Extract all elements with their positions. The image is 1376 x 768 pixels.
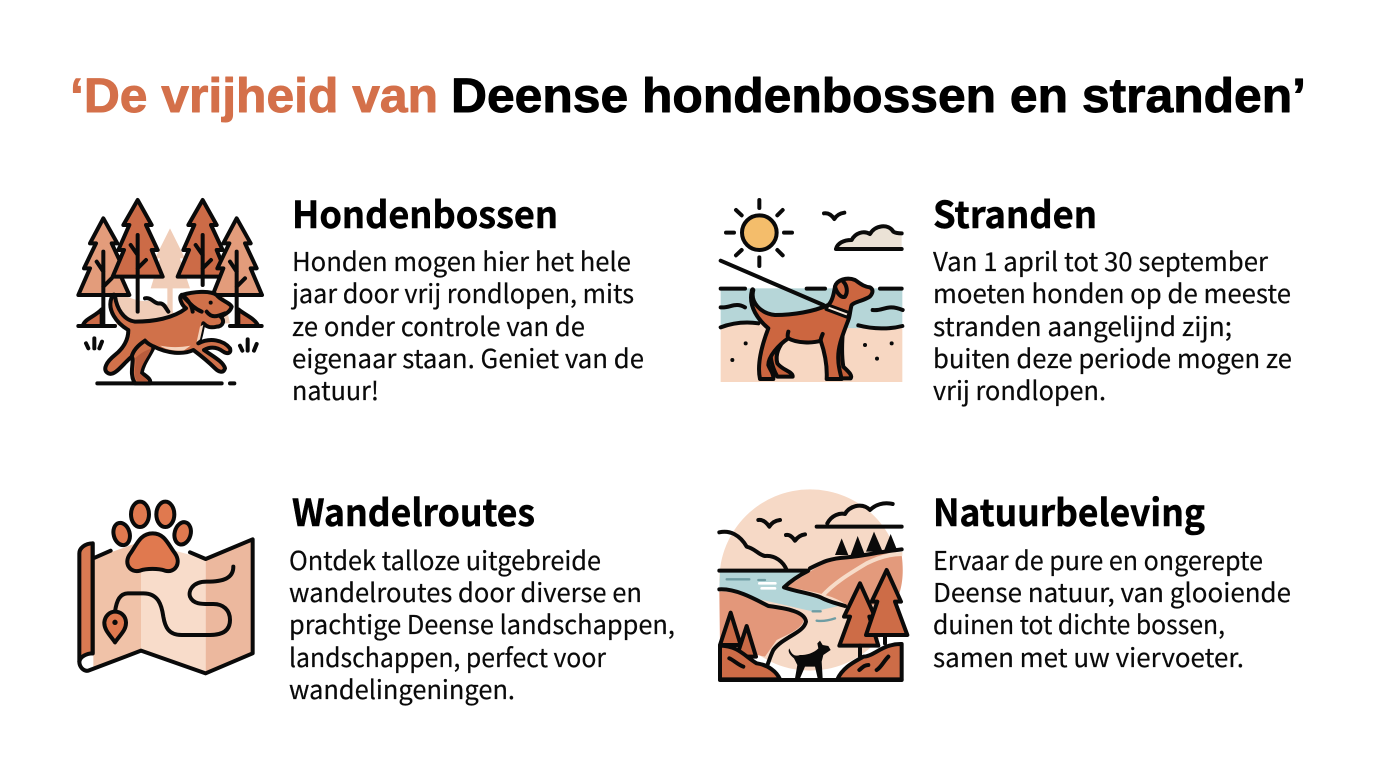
icon: dog on leash at the beach	[721, 200, 903, 382]
text block: wandelroutes	[289, 541, 675, 707]
panel: natuurbeleving	[719, 483, 1291, 680]
text block: hondenbossen: Honden mogen hier het hele	[292, 242, 631, 279]
panel: stranden	[721, 185, 1292, 408]
title: ‘De vrijheid van	[70, 70, 438, 123]
heading: Hondenbossen: Hondenbossen	[292, 185, 558, 239]
text block: wandelroutes: landschappen, perfect voor	[289, 638, 607, 675]
text block: natuurbeleving	[933, 541, 1291, 675]
text block: stranden	[933, 242, 1292, 408]
heading: Stranden: Stranden	[933, 185, 1097, 239]
text block: stranden: Van 1 april tot 30 september	[933, 242, 1269, 279]
text block: hondenbossen: ze onder controle van de	[292, 307, 585, 344]
text block: hondenbossen: natuur!	[292, 371, 379, 408]
text block: wandelroutes: wandelingeningen.	[289, 670, 515, 707]
icon: dog running in forest	[78, 200, 262, 383]
text block: wandelroutes: Ontdek talloze uitgebreide	[289, 541, 601, 578]
text block: natuurbeleving: Ervaar de pure en ongerepte	[933, 541, 1263, 578]
text block: hondenbossen	[290, 242, 644, 408]
panel: wandelroutes	[79, 483, 675, 707]
title: Deense hondenbossen en stranden’	[451, 70, 1306, 123]
heading: Natuurbeleving: Natuurbeleving	[933, 483, 1205, 537]
icon: landscape with dog silhouette	[719, 489, 907, 680]
text block: wandelroutes: wandelroutes door diverse en	[289, 573, 642, 610]
heading: Wandelroutes: Wandelroutes	[292, 483, 535, 537]
text block: natuurbeleving: samen met uw viervoeter.	[933, 638, 1244, 675]
title	[70, 70, 1306, 123]
text block: natuurbeleving: Deense natuur, van glooiende	[933, 573, 1291, 610]
text block: hondenbossen: eigenaar staan. Geniet van de	[292, 339, 644, 376]
text block: stranden: vrij rondlopen.	[933, 371, 1106, 408]
text block: stranden: buiten deze periode mogen ze	[933, 339, 1292, 376]
text block: hondenbossen: jaar door vrij rondlopen, mits	[290, 274, 634, 311]
icon: map with paw print and route	[79, 502, 253, 673]
text block: stranden: moeten honden op de meeste	[933, 274, 1291, 311]
panel: hondenbossen	[78, 185, 644, 408]
text block: wandelroutes: prachtige Deense landschappen,	[289, 605, 675, 642]
text block: natuurbeleving: duinen tot dichte bossen,	[933, 605, 1225, 642]
text block: stranden: stranden aangelijnd zijn;	[933, 307, 1232, 344]
